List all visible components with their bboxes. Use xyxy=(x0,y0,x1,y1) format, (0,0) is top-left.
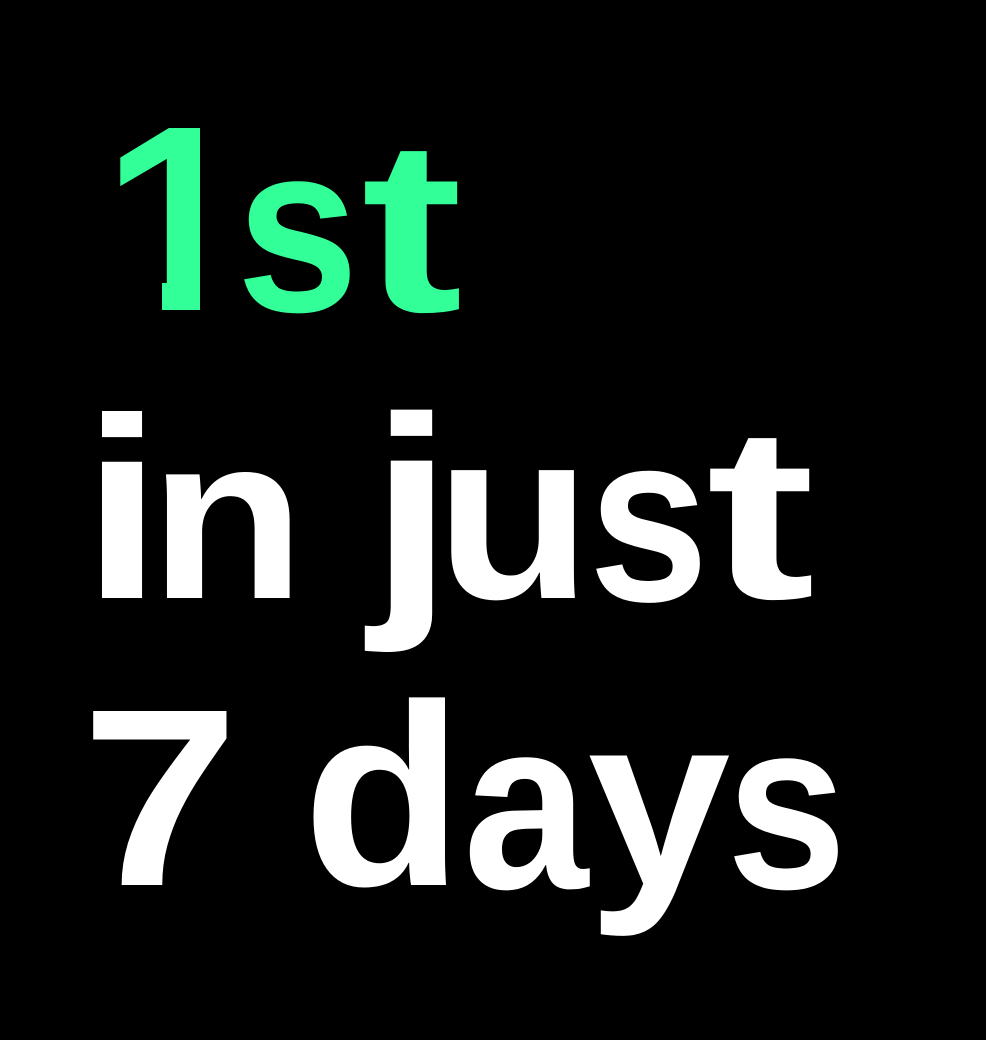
headline line 2: in just: i xyxy=(82,366,163,653)
headline line 2: in just: u xyxy=(435,379,592,649)
headline line 2: in just xyxy=(82,363,815,655)
headline line 2: in just: n xyxy=(149,386,305,648)
headline line 1: 1st: 1 xyxy=(101,71,258,366)
headline line 2: in just: j xyxy=(365,363,453,655)
headline line 3: 7 days: 7 xyxy=(81,656,239,939)
headline line 1: 1st xyxy=(120,128,459,314)
headline line 1: 1st: t xyxy=(361,89,463,363)
headline line 3: 7 days: a xyxy=(463,668,590,940)
headline line 3: 7 days xyxy=(81,652,847,941)
headline line 2: in just: s xyxy=(589,384,709,652)
headline line 2: in just: t xyxy=(706,377,815,651)
headline line 3: 7 days: y xyxy=(588,664,730,938)
headline line 3: 7 days: s xyxy=(727,671,847,940)
headline line 1: 1st: s xyxy=(236,93,359,362)
headline line 3: 7 days: d xyxy=(303,652,463,941)
